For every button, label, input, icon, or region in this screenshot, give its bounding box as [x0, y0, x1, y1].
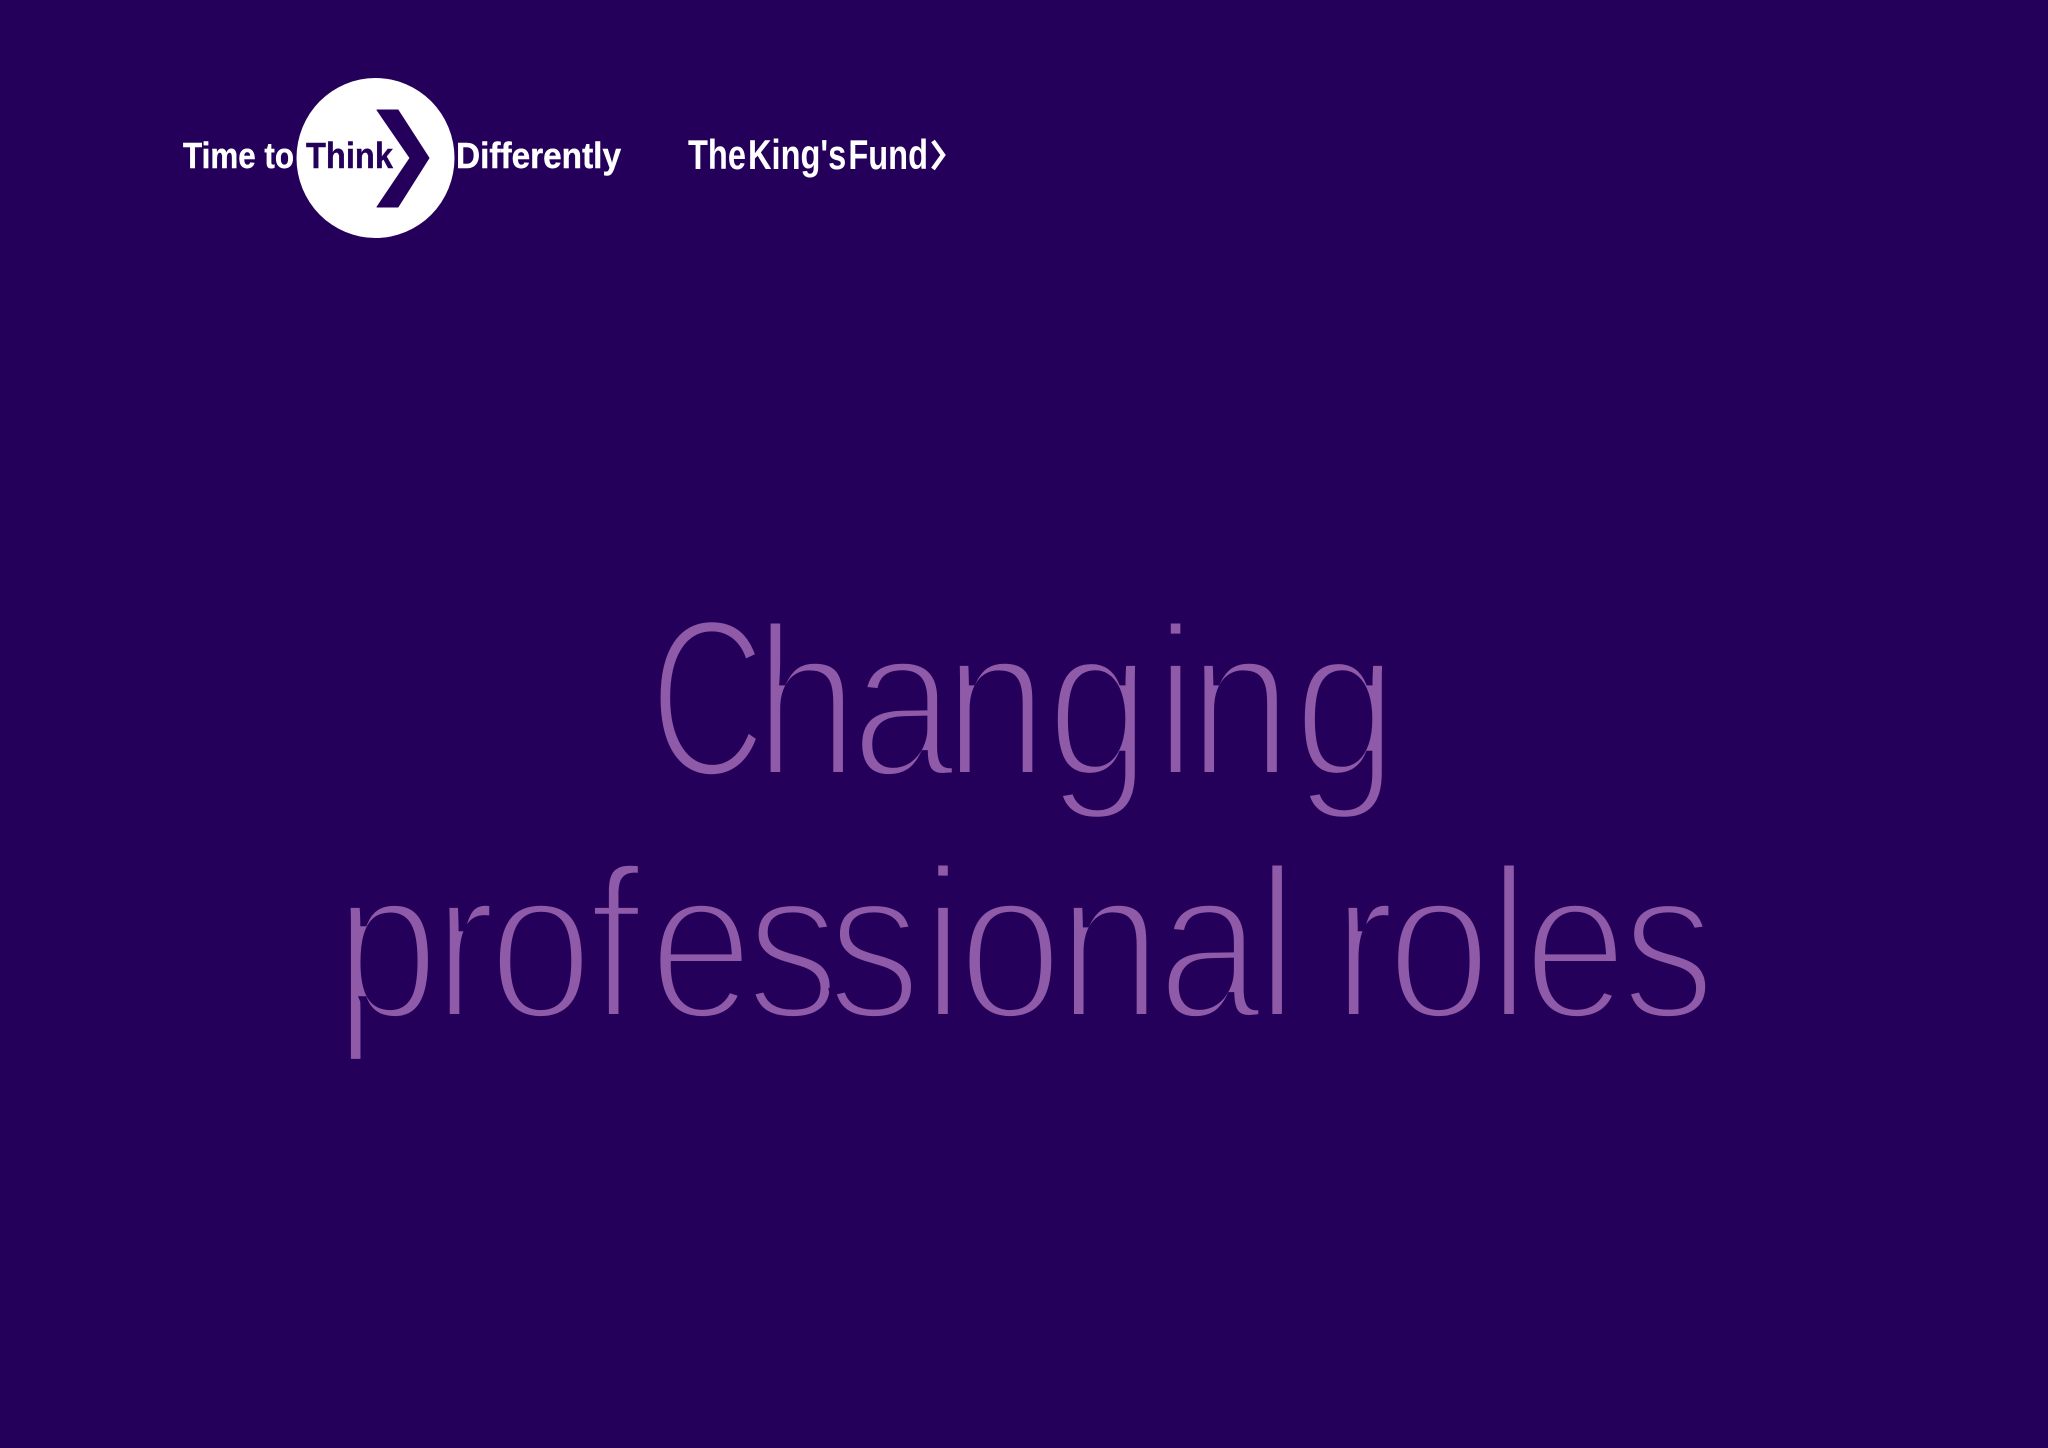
title line 2: professional roles — [335, 823, 1715, 1064]
logo: Time to Think Differently — [183, 78, 621, 238]
logo: The King's Fund — [688, 131, 943, 178]
logo text: Differently: Differently — [456, 135, 621, 176]
logo text: Time to: Time to — [183, 135, 294, 176]
title — [335, 571, 1715, 1064]
logo circle — [296, 78, 454, 238]
wordmark chevron — [933, 141, 943, 169]
logo text: Think: Think — [306, 135, 394, 176]
title line 1: C — [650, 571, 766, 824]
logo chevron — [377, 110, 429, 207]
logo wordmark: The King's Fund — [688, 131, 928, 178]
title line 1: hanging — [754, 581, 1398, 822]
